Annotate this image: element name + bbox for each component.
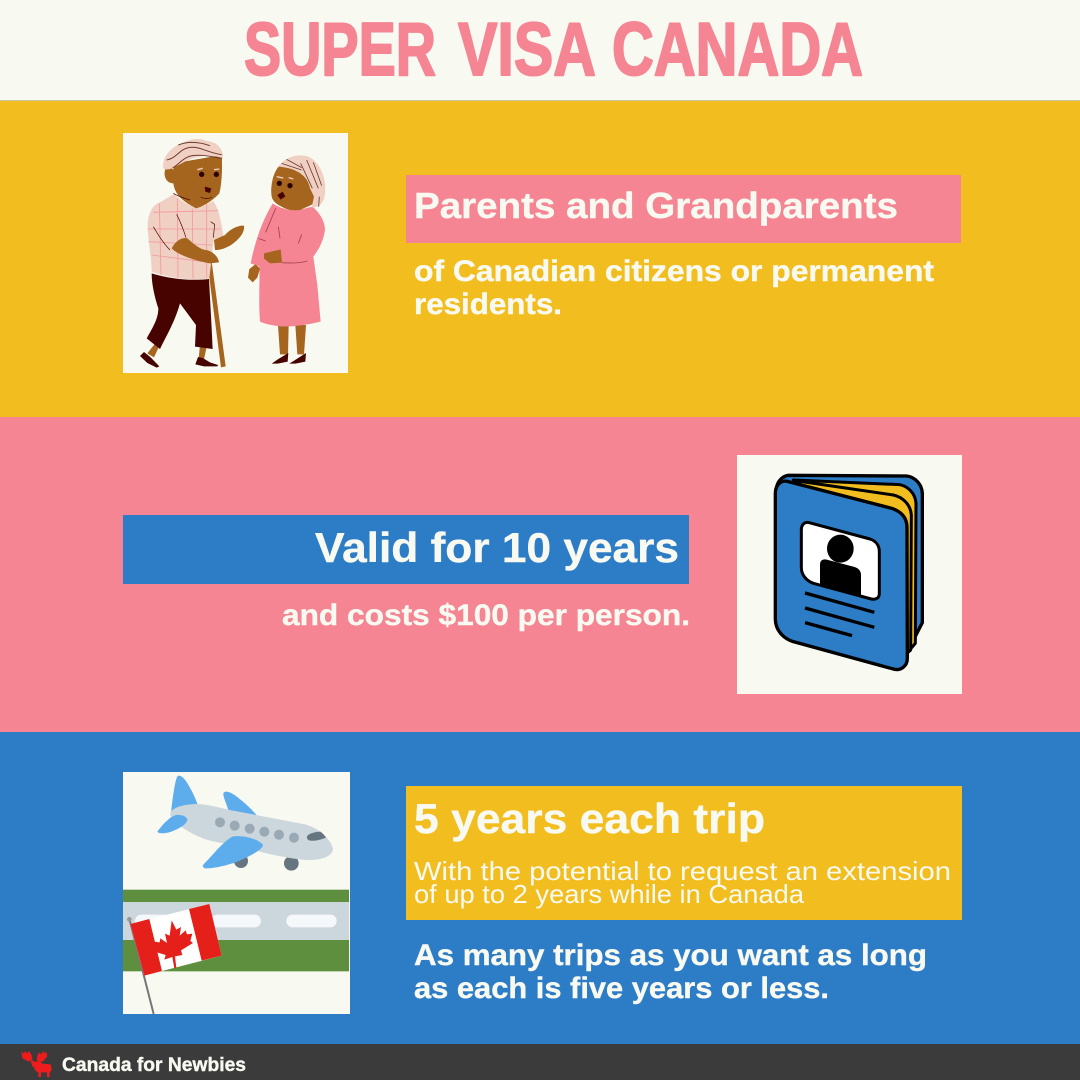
title	[244, 7, 863, 91]
runway	[123, 890, 349, 902]
panel: parents and grandparents	[0, 101, 1080, 417]
heading box: 5 years each trip: With the potential to request an extension	[414, 856, 951, 886]
heading box: 5 years each trip: 5 years each trip	[414, 795, 765, 842]
woman dress	[251, 203, 325, 326]
woman hair	[278, 155, 325, 208]
text: citizens or permanent residents	[414, 255, 934, 321]
text: as many trips: as each is five years or less.	[414, 972, 829, 1005]
man legs and shoes	[147, 344, 207, 359]
icon: passport	[737, 455, 962, 694]
title: SUPER	[244, 7, 436, 91]
title: VISA	[458, 7, 596, 91]
heading bar: parents and grandparents: Parents and Grandparents	[414, 185, 898, 226]
heading bar: valid for 10 years	[123, 515, 689, 584]
text: as many trips	[414, 939, 927, 1005]
heading box: 5 years each trip: of up to 2 years while in Canada	[414, 879, 805, 909]
panel: validity and cost	[0, 417, 1080, 732]
title: CANADA	[612, 7, 863, 91]
text: as many trips: As many trips as you want as long	[414, 939, 927, 972]
text: costs: and costs $100 per person.	[282, 599, 690, 632]
man arms	[214, 226, 244, 250]
man shirt	[148, 194, 223, 279]
footer text: Canada for Newbies	[62, 1055, 246, 1076]
flag	[130, 904, 222, 976]
heading bar: parents and grandparents	[406, 175, 961, 243]
heading box: 5 years each trip	[406, 786, 962, 920]
woman legs and shoes	[278, 325, 306, 354]
icon: moose logo	[21, 1051, 52, 1077]
heading bar: valid for 10 years: Valid for 10 years	[315, 524, 679, 571]
cane	[207, 262, 226, 367]
man head	[165, 155, 222, 208]
woman head	[271, 162, 321, 210]
footer	[0, 1044, 1080, 1080]
text: citizens or permanent residents: residents.	[414, 288, 562, 321]
plane	[234, 854, 248, 868]
text: citizens or permanent residents: of Canadian citizens or permanent	[414, 255, 934, 288]
illustration: plane, runway and flag	[123, 772, 350, 1014]
illustration: elderly couple	[123, 133, 348, 373]
woman hands	[264, 249, 282, 263]
flag pole	[130, 920, 154, 1014]
panel: trip length	[0, 732, 1080, 1044]
header band	[0, 0, 1080, 101]
